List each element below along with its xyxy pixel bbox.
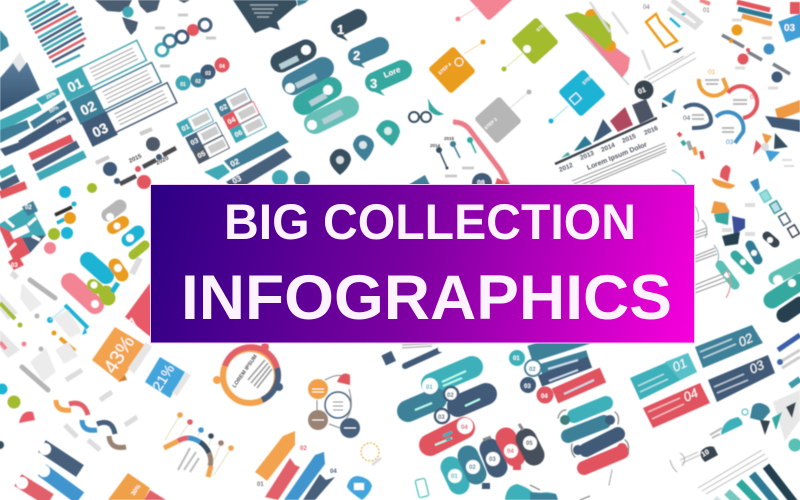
bar chart 2012 to 2016: 2012 (558, 162, 575, 174)
dashed badge and pin (347, 443, 381, 500)
four band stack with circles (509, 334, 603, 404)
ascending arrows: 04 (330, 469, 337, 475)
five-step vertical capsules: 05 (526, 441, 533, 447)
six small cards: 01 (181, 123, 191, 133)
four-step capsule stack: 01 (426, 385, 433, 391)
cards 01 to 04: 01 (670, 355, 689, 375)
four arc cycle: 02 (750, 94, 758, 101)
world map (95, 0, 190, 35)
heading: big collection: BIG COLLECTION (224, 194, 636, 250)
timeline 2005 to 2020: 2015 (128, 153, 143, 165)
banner ribbons 02 03 (204, 131, 292, 191)
four arc cycle: 04 (683, 115, 691, 122)
pin chain (155, 15, 216, 66)
numbered panel 01 02 03: 01 (64, 74, 86, 96)
cards 01 to 04 (630, 325, 775, 428)
five-step vertical capsules: 03 (489, 457, 496, 463)
speech bubble stack (280, 45, 348, 130)
orange and red percent boxes: 30% (131, 483, 143, 497)
percentage bands: 50% (48, 105, 60, 115)
bottom teal shape (505, 484, 590, 500)
six small cards: 05 (197, 150, 207, 160)
four band stack with circles: 02 (529, 367, 536, 373)
four arc cycle (683, 69, 758, 146)
numbered bubbles 1 2 3 (336, 18, 402, 96)
step card orange (428, 40, 486, 94)
percentage bands: 75% (55, 116, 67, 126)
top right ribbons: 03 (784, 23, 796, 34)
area chart (0, 30, 40, 112)
process diagram with orange arrows: 04 (643, 5, 650, 11)
small square icon (381, 351, 396, 366)
vertical timeline pins (430, 136, 476, 176)
numbered circles 01 to 04 (176, 58, 230, 90)
step card green (502, 17, 559, 72)
node cycle diagram (308, 374, 360, 438)
banner ribbons 02 03: 02 (229, 156, 241, 169)
battery outline (415, 478, 429, 498)
orange stamp (712, 165, 735, 189)
five-step vertical capsules: 02 (469, 465, 476, 471)
badges above banner: 08 (477, 180, 485, 187)
left edge dots (0, 384, 35, 449)
grouped rounded capsules (70, 206, 145, 308)
four-step capsule stack: 02 (447, 393, 454, 399)
red percentage box behind banner (121, 283, 152, 338)
badges above banner (408, 173, 510, 193)
timeline 2005 to 2020 (96, 129, 176, 189)
six small cards: 02 (219, 103, 229, 113)
four band stack with circles: 03 (524, 384, 531, 390)
bar chart 2012 to 2016: 2013 (579, 150, 596, 162)
process diagram with orange arrows: 01 (703, 8, 710, 14)
four-step capsule stack: 04 (461, 425, 468, 431)
heading: infographics: INFOGRAPHICS (181, 263, 672, 333)
four band stack with circles: 04 (541, 394, 548, 400)
ribbon arrows (30, 138, 85, 177)
title banner (150, 184, 694, 343)
horizontal striped bar chart (25, 0, 86, 67)
step card grey: STEP 3 (483, 116, 499, 131)
left text blocks (0, 270, 88, 390)
bar chart 2012 to 2016: Lorem Ipsum Dolor (586, 141, 649, 172)
vertical timeline pins: 2015 (444, 136, 455, 141)
21 percent blue card (145, 357, 191, 398)
step card green: STEP 2 (535, 18, 551, 33)
X shaped panel: 03 (11, 263, 18, 269)
bar chart 2012 to 2016: 01 (637, 87, 647, 96)
bar chart 2012 to 2016: 2015 (621, 133, 638, 145)
hex ribbon cards (16, 443, 80, 500)
teal capsule stack right (772, 265, 800, 386)
numbered bubbles 1 2 3: 1 (337, 22, 344, 37)
five-step vertical capsules (443, 424, 537, 489)
bar chart 2012 to 2016 (555, 80, 667, 187)
numbered bubbles 1 2 3: Lore (382, 65, 402, 80)
donut pie (753, 133, 794, 166)
four arc cycle: 03 (726, 139, 734, 146)
square icon and label bar (402, 343, 444, 366)
arcs with text right of banner (694, 205, 730, 298)
four-step capsule stack: 03 (438, 415, 445, 421)
badge 10: 10 (700, 449, 711, 459)
step card grey (474, 90, 532, 144)
five-step vertical capsules: 04 (507, 449, 514, 455)
curved arc near banner (672, 170, 686, 184)
21 percent blue card: 21% (149, 361, 177, 394)
four thin capsules (558, 403, 629, 485)
43 percent orange card (92, 327, 152, 382)
six small cards: 03 (190, 137, 200, 147)
battery icons (760, 190, 799, 237)
step circles above banner (272, 170, 310, 187)
red percentage box behind banner: 7 (121, 314, 149, 338)
ascending arrows: 01 (257, 482, 264, 488)
ascending arrows: 02 (300, 446, 307, 452)
bottom right bar chart (698, 450, 800, 500)
numbered bubbles 1 2 3: 3 (370, 76, 377, 91)
badge 10 (670, 446, 718, 472)
six small cards: 06 (234, 129, 244, 139)
six small cards: 04 (227, 116, 237, 126)
numbered panel 01 02 03 (56, 40, 178, 147)
step card orange: STEP 4 (437, 61, 453, 76)
circular progress ring: LOREM IPSUM (232, 354, 259, 389)
step card blue (548, 69, 606, 124)
blue icon (750, 178, 760, 192)
step card pink (456, 0, 514, 22)
ascending arrows (255, 431, 337, 500)
process diagram with orange arrows (643, 0, 710, 47)
half ring with data dots (164, 412, 234, 477)
numbered circles 01 to 04: 01 (180, 82, 186, 88)
X shaped panel (0, 201, 46, 270)
five-step vertical capsules: 01 (451, 474, 458, 480)
S curve (56, 370, 137, 450)
percentage bands (0, 88, 73, 156)
timeline 2005 to 2020: 2020 (155, 155, 170, 167)
numbered panel 01 02 03: 02 (77, 97, 99, 119)
cards 01 to 04: 04 (681, 385, 700, 405)
small step pins with spikes (710, 390, 800, 452)
dark speech box (233, 0, 309, 33)
six small cards (177, 88, 266, 163)
small grey text strip (644, 47, 696, 108)
banner ribbons 02 03: 03 (231, 173, 243, 186)
X shaped panel: 02 (25, 205, 32, 211)
chain of teal circles (720, 236, 775, 285)
circular progress ring (213, 343, 283, 403)
step card blue: STEP 1 (581, 71, 597, 86)
right top timeline (722, 20, 790, 88)
percentage bands: 25% (45, 91, 57, 101)
numbered circles 01 to 04: 02 (195, 79, 201, 85)
four band stack with circles: 01 (513, 356, 520, 362)
colored pie shape (711, 201, 755, 246)
vertical timeline pins: 2014 (430, 143, 441, 148)
43 percent orange card: 43% (100, 332, 140, 378)
numbered panel 01 02 03: 03 (89, 119, 111, 141)
left ribbon fragment (0, 168, 26, 195)
bar chart 2012 to 2016: 2014 (600, 142, 617, 154)
pink curved panel edge (453, 122, 508, 185)
cards 01 to 04: 02 (736, 330, 756, 350)
orange and red percent boxes (108, 473, 166, 500)
cards 01 to 04: 03 (747, 357, 767, 377)
small bar pictogram (678, 133, 703, 159)
owl icon rings (400, 68, 444, 122)
numbered circles 01 to 04: 04 (219, 64, 225, 70)
map pins (330, 120, 400, 175)
top right ribbons (737, 2, 800, 132)
four arc cycle: 01 (708, 69, 716, 76)
four-step capsule stack (408, 367, 486, 445)
numbered bubbles 1 2 3: 2 (353, 48, 360, 63)
numbered circles 01 to 04: 03 (205, 71, 211, 77)
bar chart 2012 to 2016: 2016 (643, 125, 660, 137)
chain of coloured dots (44, 183, 97, 254)
area chart green and pink (565, 2, 650, 85)
